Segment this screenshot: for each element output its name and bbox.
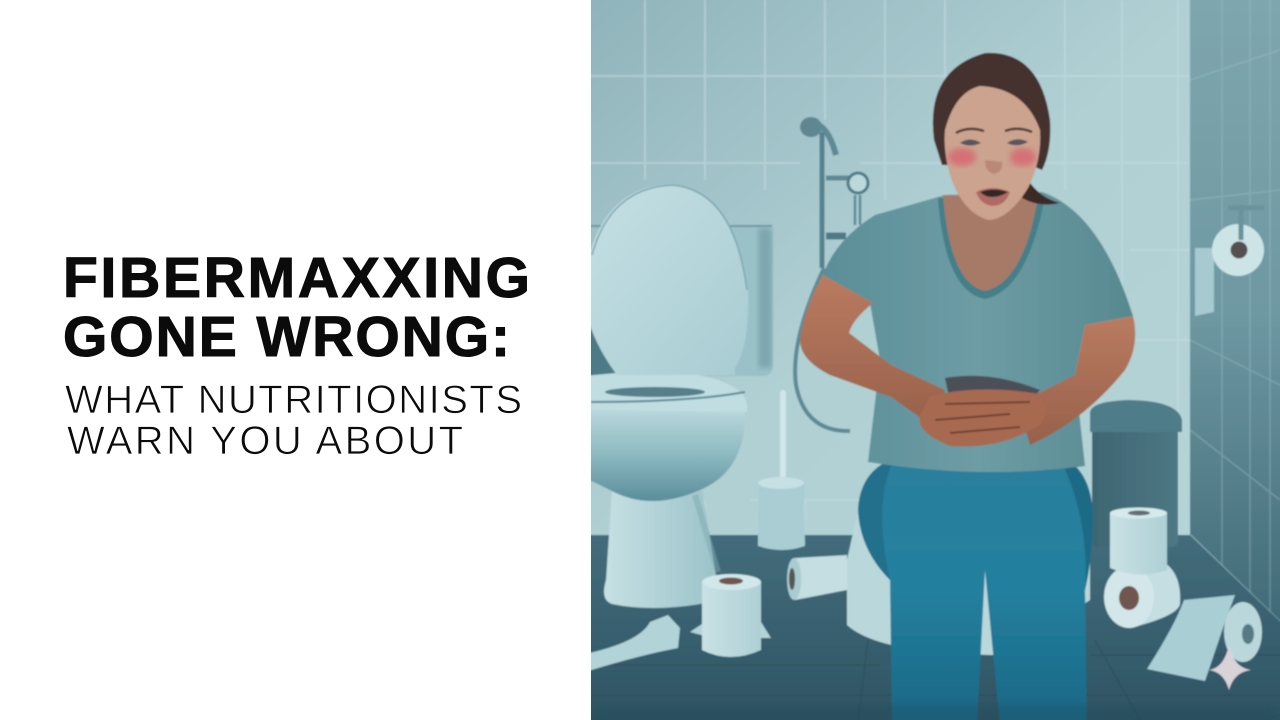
eyes	[960, 139, 1028, 146]
floor	[585, 535, 1280, 720]
left white panel	[0, 0, 591, 720]
eyebrows	[956, 129, 1032, 133]
title: fibermaxxing gone wrong: GONE WRONG:	[63, 305, 510, 369]
toilet base	[604, 490, 718, 608]
soft vignette on the floor edge	[892, 706, 1087, 720]
toilet seat	[585, 372, 747, 412]
waste bin	[1090, 400, 1182, 547]
paper strip on the floor	[585, 615, 680, 672]
white pedestal under woman	[847, 510, 1090, 655]
title: fibermaxxing gone wrong: FIBERMAXXING	[63, 246, 530, 310]
subtitle: what nutritionists warn you about: WARN YOU ABOUT	[67, 419, 463, 463]
stacked toilet rolls	[1104, 508, 1180, 628]
subtitle: what nutritionists warn you about: WHAT NUTRITIONISTS	[65, 378, 522, 422]
toilet roll on its side	[787, 555, 847, 600]
flushed cheeks	[948, 148, 976, 166]
ponytail	[1022, 180, 1060, 205]
unrolled paper and roll	[1147, 595, 1262, 681]
back wall with tiles	[585, 0, 1195, 540]
face	[945, 86, 1040, 220]
toilet bowl	[585, 405, 745, 501]
toilet paper on wall holder	[1195, 205, 1264, 316]
toilet cistern	[591, 226, 772, 376]
neck and chest	[943, 195, 1038, 291]
mouth	[976, 188, 1010, 206]
side wall with tiles	[1190, 0, 1280, 626]
hair	[933, 53, 1050, 170]
shower head and hose	[795, 117, 868, 431]
shadow left of toilet	[591, 327, 616, 376]
title: fibermaxxing gone wrong	[63, 246, 530, 369]
shadow above hands	[944, 375, 1040, 394]
toilet lid	[588, 184, 748, 375]
nose	[985, 160, 1002, 174]
woman	[800, 53, 1135, 720]
t-shirt	[823, 192, 1133, 472]
subtitle: what nutritionists warn you about	[65, 378, 522, 463]
toilet brush and holder	[758, 390, 805, 550]
jeans	[858, 455, 1093, 720]
photo panel: bathroom scene	[585, 0, 1280, 720]
sparkle star watermark	[1209, 645, 1251, 690]
toilet roll standing	[690, 574, 771, 657]
arms	[800, 275, 1135, 445]
hands on stomach	[919, 389, 1046, 447]
